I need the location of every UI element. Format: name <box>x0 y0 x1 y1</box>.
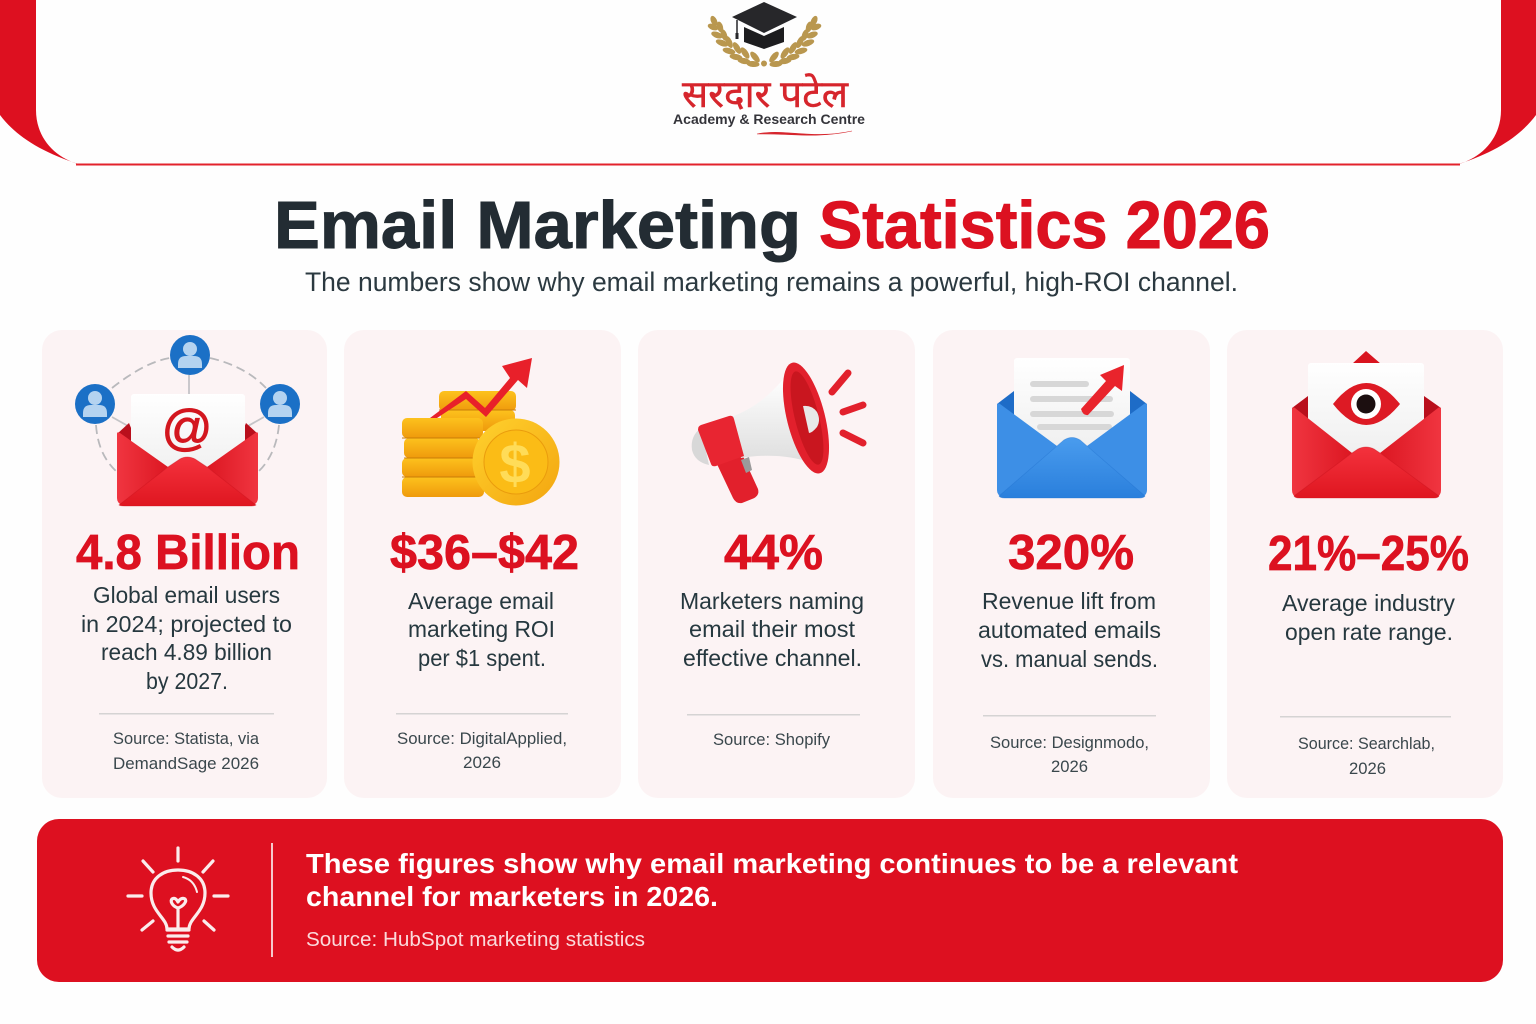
source <box>113 729 260 773</box>
icon: graduation cap <box>732 2 797 49</box>
stat description: Average industry <box>1282 590 1455 616</box>
stat description <box>408 588 555 671</box>
title <box>274 188 1270 263</box>
icon: user top <box>170 335 210 375</box>
stat description: reach 4.89 billion <box>101 639 272 665</box>
stat description: automated emails <box>978 617 1161 643</box>
logo name: सरदार पटेल <box>682 72 849 116</box>
icon: envelope with network of users: @ <box>162 400 212 456</box>
stat description: Revenue lift from <box>982 588 1156 614</box>
logo subtitle: Academy & Research Centre <box>673 112 866 127</box>
header band with logo <box>0 0 1536 166</box>
icon: laurel wreath <box>707 15 822 68</box>
panel: global email users <box>42 330 327 798</box>
panel: ROI <box>344 330 621 798</box>
logo swoosh <box>757 131 852 135</box>
stat description: email their most <box>689 616 856 642</box>
stat description <box>680 588 864 671</box>
banner source: Source: HubSpot marketing statistics <box>306 929 645 951</box>
banner message: These figures show why email marketing continues to be a relevant <box>306 848 1238 879</box>
source: DemandSage 2026 <box>113 754 259 773</box>
source <box>1298 734 1435 778</box>
source: Source: Searchlab, <box>1298 734 1435 753</box>
title: Email Marketing <box>274 188 801 263</box>
right red corner <box>1457 0 1536 164</box>
stat value: 21%–25% <box>1268 527 1469 581</box>
icon: coin stack with rising arrow: $ <box>499 432 531 495</box>
banner message <box>306 848 1238 912</box>
panel: most effective channel <box>638 330 915 798</box>
header bottom rule <box>76 164 1460 166</box>
left red corner <box>0 0 80 164</box>
stat description: effective channel. <box>683 645 862 671</box>
stat value: 44% <box>724 526 823 580</box>
stat description: Marketers naming <box>680 588 864 614</box>
stat description: by 2027. <box>146 668 228 694</box>
source <box>397 729 567 772</box>
icon: coin stack with rising arrow <box>402 358 560 506</box>
icon: megaphone <box>692 358 863 503</box>
banner message: channel for marketers in 2026. <box>306 881 718 912</box>
stat description: per $1 spent. <box>418 645 546 671</box>
icon: blue envelope with growth arrow <box>997 358 1147 498</box>
source: Source: Statista, via <box>113 729 260 748</box>
source: Source: DigitalApplied, <box>397 729 567 748</box>
stat description: open rate range. <box>1285 619 1453 645</box>
icon: light bulb <box>128 848 228 950</box>
stat description <box>978 588 1161 672</box>
source: 2026 <box>1051 757 1088 776</box>
panel: automated revenue lift <box>933 330 1210 798</box>
icon: user left <box>75 384 115 424</box>
source <box>990 733 1149 776</box>
source: 2026 <box>463 753 501 772</box>
title: Statistics 2026 <box>819 188 1270 263</box>
panel: conclusion banner <box>37 819 1503 982</box>
stat description: vs. manual sends. <box>981 646 1158 672</box>
icon: red envelope with eye <box>1292 351 1441 498</box>
icon: user right <box>260 384 300 424</box>
stat description: Average email <box>408 588 554 614</box>
stat value: 4.8 Billion <box>76 526 300 580</box>
panel: open rate <box>1227 330 1503 798</box>
source: Source: Designmodo, <box>990 733 1149 752</box>
logo <box>673 2 866 135</box>
stat value: $36–$42 <box>390 526 579 580</box>
stat description <box>1282 590 1455 645</box>
subtitle: The numbers show why email marketing remains a powerful, high-ROI channel. <box>305 267 1238 297</box>
stat description <box>81 582 292 694</box>
icon: envelope with network of users <box>75 335 300 506</box>
source: Source: Shopify <box>713 730 830 749</box>
source: 2026 <box>1349 759 1386 778</box>
stat description: marketing ROI <box>408 616 555 642</box>
stat description: in 2024; projected to <box>81 611 292 637</box>
stat value: 320% <box>1008 526 1134 580</box>
stat description: Global email users <box>93 582 280 608</box>
